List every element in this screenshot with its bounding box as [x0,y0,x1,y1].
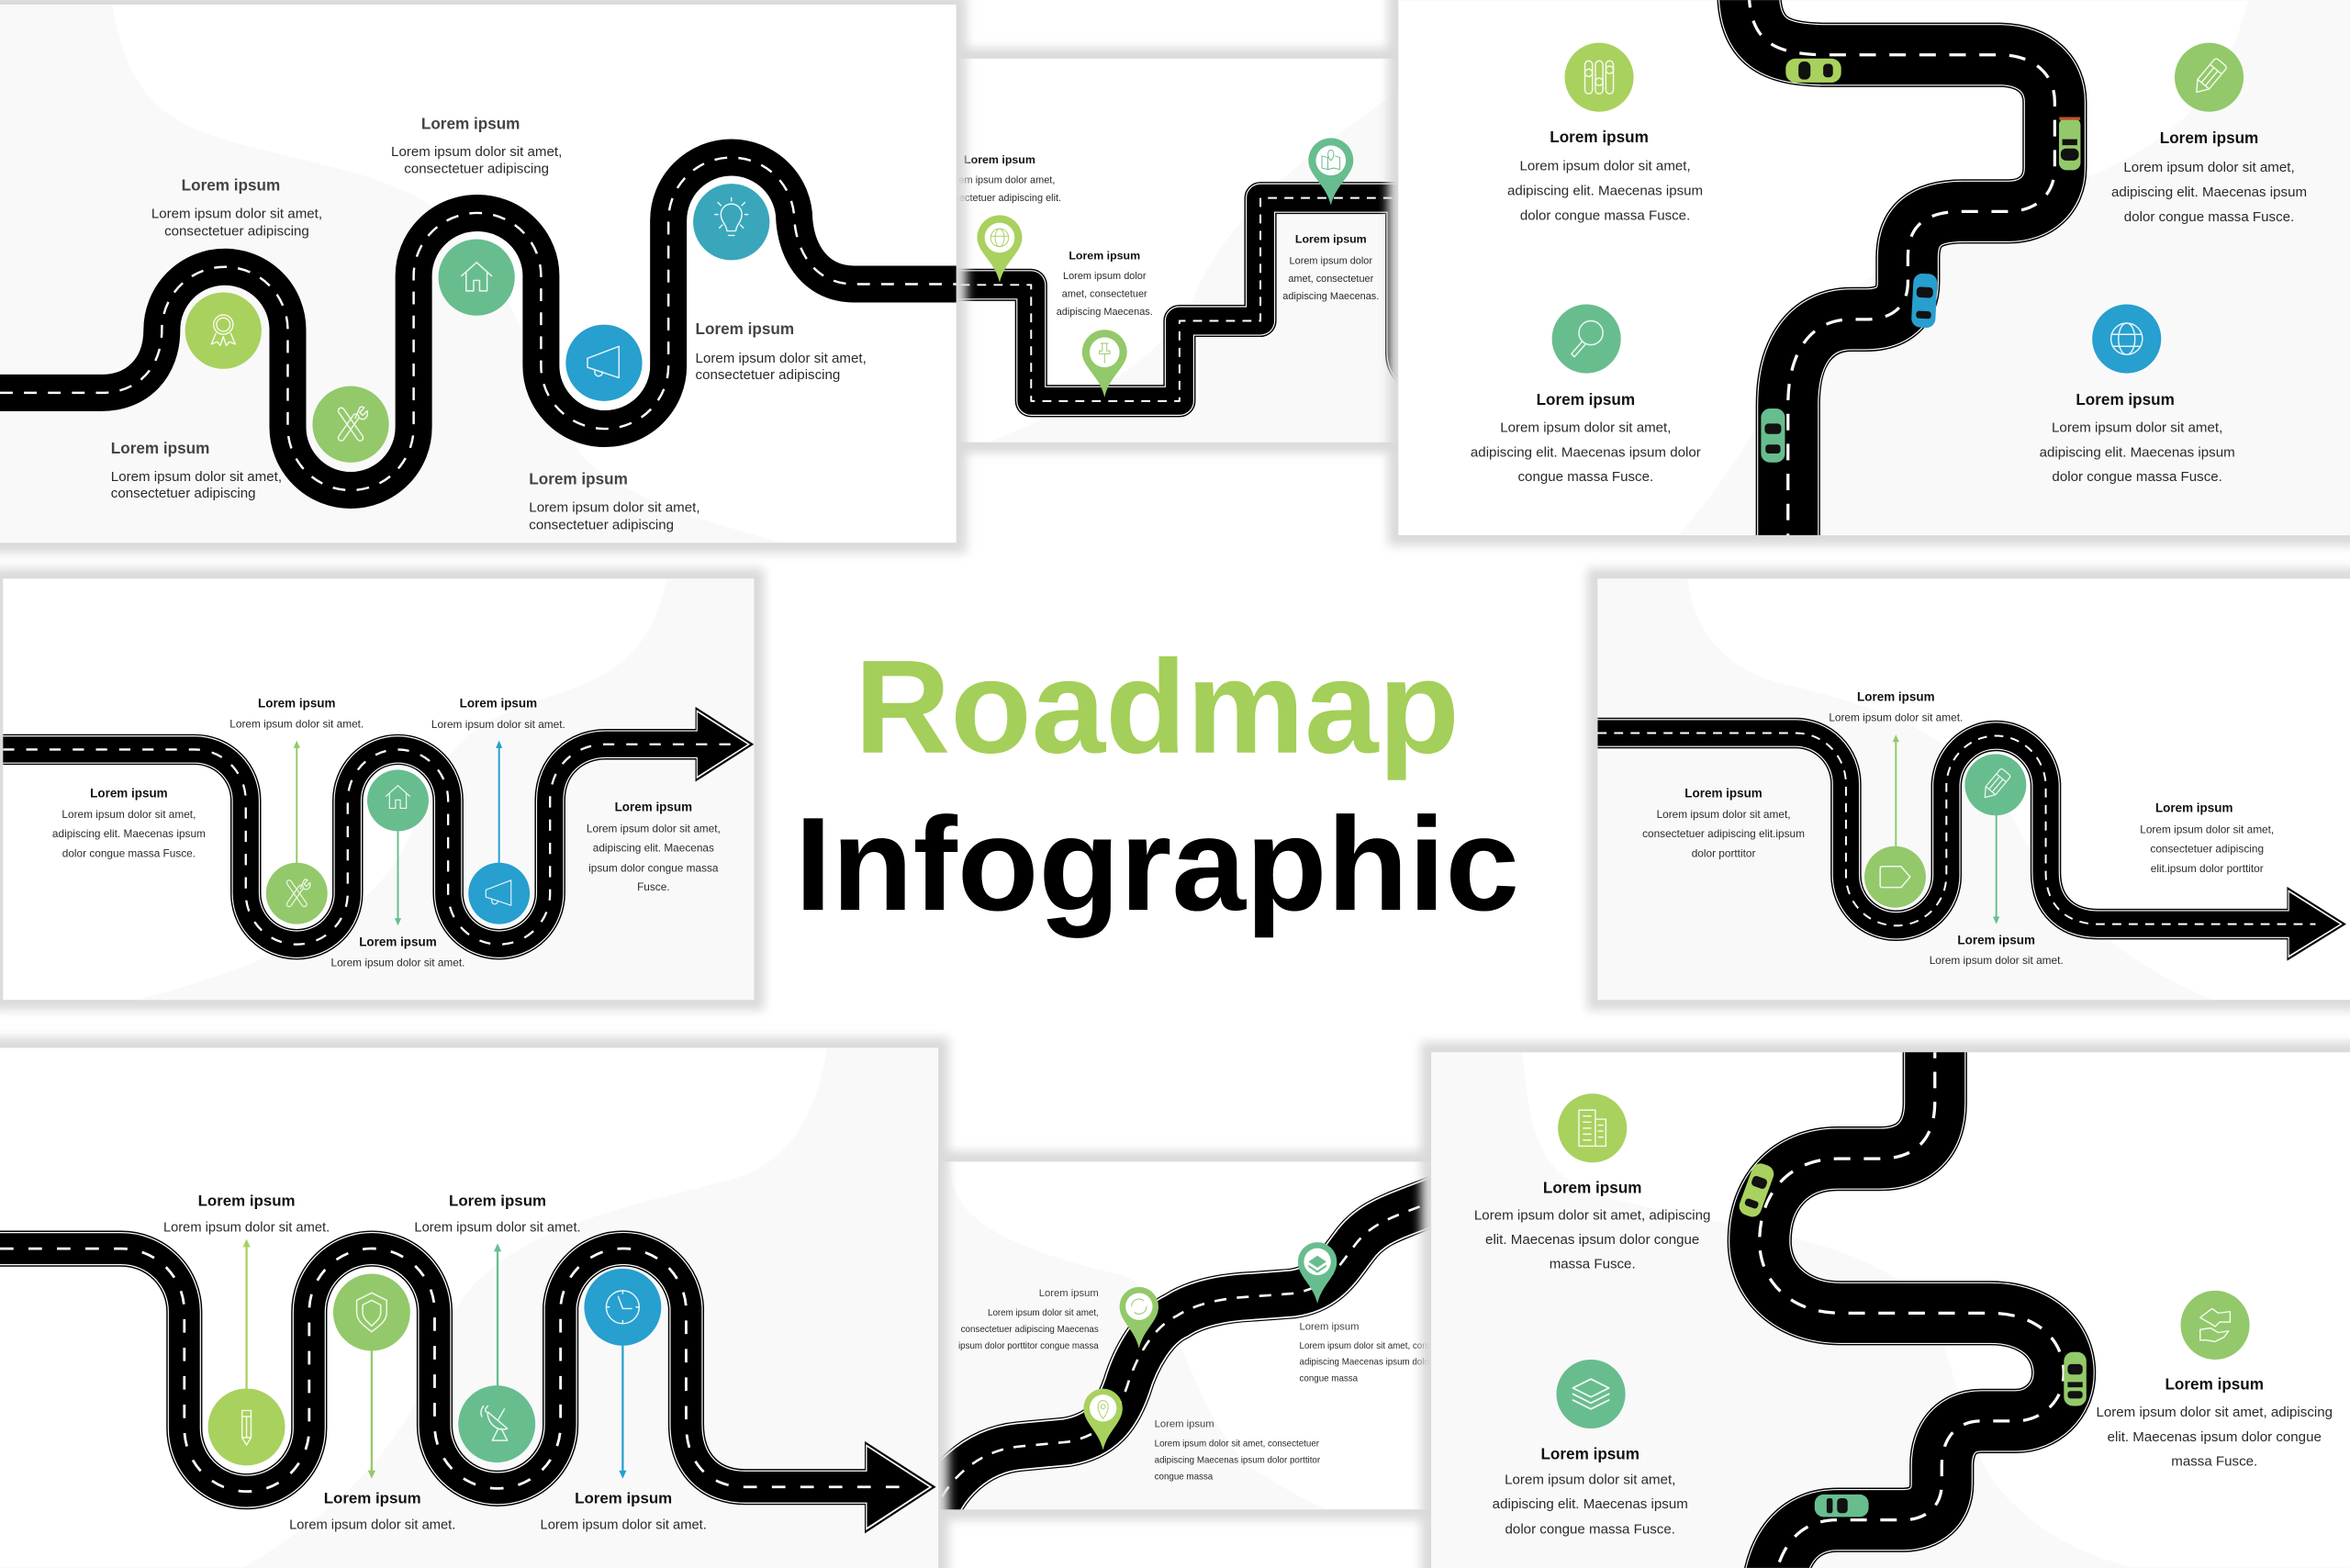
text: upper right label: congue massa [1300,1373,1359,1383]
marker: megaphone with up arrow [468,741,530,924]
text: top label two: Lorem ipsum [449,1192,546,1209]
text: top label: Lorem ipsum dolor sit amet. [1829,711,1963,724]
text: pin one label [958,155,1061,204]
title [795,633,1519,938]
panel: bottom left slide with arrow road [0,1037,948,1568]
text: megaphone label: Lorem ipsum [529,469,628,487]
text: top label two: Lorem ipsum dolor sit amet. [414,1220,581,1235]
text: top label one: Lorem ipsum dolor sit amet. [163,1220,330,1235]
text: right label: Lorem ipsum [615,800,692,813]
marker: clock with down arrow [584,1269,661,1479]
text: pin two label: amet, consectetuer [1062,288,1147,299]
road: meander with arrow head [3,707,754,945]
icon: tools [312,386,389,463]
text: magnifier label: congue massa Fusce. [1518,469,1653,485]
text: pin three label: amet, consectetuer [1288,274,1374,285]
text: top label two: Lorem ipsum dolor sit amet. [431,718,565,731]
car: green rotated [1739,1163,1774,1217]
text: right label: adipiscing elit. Maecenas [593,841,714,854]
text: megaphone label: consectetuer adipiscing [529,517,674,532]
text: pencil label: adipiscing elit. Maecenas ipsum [2111,185,2307,200]
text: top label two [431,697,565,731]
text: pin one label: consectetuer adipiscing elit. [938,193,1061,204]
text: pencil label [2111,129,2307,225]
road: winding [0,158,959,490]
panel: bottom right slide with cars [1421,1042,2350,1568]
pin: layers [1298,1242,1337,1304]
panel: middle right slide with arrow road [1587,568,2350,1011]
car: teal [1761,409,1785,463]
text: right label: elit.ipsum dolor porttitor [2151,862,2264,875]
text: top label one [229,696,364,730]
text: pin three label [1282,233,1379,302]
text: top label two [414,1192,581,1235]
text: upper right label [1300,1322,1429,1383]
icon: light bulb [693,184,769,260]
car: light green vertical [2064,1352,2087,1406]
text: lower label [1155,1418,1321,1483]
text: megaphone label: Lorem ipsum dolor sit amet, [529,500,700,516]
text: pin three label: Lorem ipsum dolor [1290,255,1372,266]
car: green horizontal [1785,59,1841,83]
text: magnifier label: Lorem ipsum [1537,390,1635,409]
text: magnifier label: adipiscing elit. Maecenas ipsum dolor [1471,444,1701,460]
pin: map [1308,138,1353,206]
text: globe label: adipiscing elit. Maecenas ipsum [2040,444,2235,460]
text: layers label [1493,1445,1688,1537]
pin: steering wheel [977,215,1022,283]
text: megaphone label [529,469,700,532]
text: handshake label [2096,1375,2333,1469]
text: upper right label: Lorem ipsum [1300,1321,1360,1332]
text: pin two label: Lorem ipsum dolor [1063,271,1147,282]
text: pencil label: dolor congue massa Fusce. [2124,209,2294,225]
road: wide curve [1760,1042,2064,1568]
text: bottom label two [541,1490,707,1532]
text: bulb label: Lorem ipsum [696,319,794,338]
text: right label: consectetuer adipiscing [2150,842,2264,855]
text: house label: consectetuer adipiscing [404,162,549,177]
marker: tools with up arrow [266,741,328,924]
text: house label [391,115,562,177]
road: meander with arrow head [0,1249,936,1533]
text: bottom label [1930,934,2064,967]
text: left label: Lorem ipsum dolor sit amet, [988,1308,1099,1318]
road: meander with arrow head [1597,733,2346,961]
car: teal horizontal [1815,1495,1869,1517]
text: pin two label: Lorem ipsum [1069,250,1140,263]
text: left label: Lorem ipsum [1039,1288,1099,1299]
panel: bottom middle slide with diagonal road [929,1151,1466,1520]
text: sliders label [1507,128,1703,223]
text: lower label: Lorem ipsum dolor sit amet, consectetuer [1155,1439,1320,1450]
marker: pencil with down arrow [1964,754,2026,924]
text: lower label: adipiscing Maecenas ipsum dolor porttitor [1155,1456,1321,1466]
text: tools label: consectetuer adipiscing [111,486,256,501]
text: top label one [163,1192,330,1235]
text: sliders label: Lorem ipsum [1550,128,1649,146]
text: bulb label: consectetuer adipiscing [696,367,840,383]
text: bottom label: Lorem ipsum [359,935,437,948]
text: top label [1829,689,1963,724]
text: bottom label two: Lorem ipsum [575,1490,672,1507]
road: diagonal [933,1199,1438,1517]
text: magnifier label: Lorem ipsum dolor sit amet, [1500,420,1671,435]
text: bulb label: Lorem ipsum dolor sit amet, [696,351,867,366]
text: layers label: Lorem ipsum [1540,1445,1639,1463]
text: bulb label [696,319,867,383]
marker: pencil with up arrow [208,1239,285,1465]
text: right label [2140,801,2274,875]
icon: layers [1557,1360,1626,1428]
text: right label [587,800,721,893]
title: Roadmap [855,633,1460,781]
panel: middle left slide with arrow road [0,568,765,1011]
text: house label: Lorem ipsum [421,115,520,133]
icon: megaphone [565,325,643,401]
icon: house [439,240,515,316]
text: handshake label: elit. Maecenas ipsum dolor congue [2108,1429,2322,1445]
text: left label: dolor porttitor [1692,846,1755,859]
text: left label: consectetuer adipiscing elit.ipsum [1642,827,1805,840]
pin: location [1083,1389,1123,1450]
text: building label: massa Fusce. [1550,1256,1636,1271]
icon: sliders [1564,43,1634,112]
text: right label: Lorem ipsum dolor sit amet, [587,823,721,835]
text: upper right label: Lorem ipsum dolor sit amet, consectetuer [1300,1341,1465,1351]
road: wide curve [1749,0,2054,543]
panel: top left slide with winding road [0,0,967,554]
text: bottom label: Lorem ipsum dolor sit amet. [1930,954,2064,967]
text: award label: Lorem ipsum [182,175,280,194]
text: tools label [111,439,282,501]
text: award label [151,175,322,239]
text: left label: ipsum dolor porttitor congue massa [958,1341,1099,1351]
car: light green vertical [2059,117,2080,170]
car: blue [1911,273,1938,329]
text: globe label: dolor congue massa Fusce. [2052,469,2222,485]
pin: push pin [1082,330,1127,398]
marker: house with down arrow [367,769,429,925]
text: pin three label: adipiscing Maecenas. [1282,291,1379,302]
marker: tag with up arrow [1864,734,1926,908]
text: left label: adipiscing elit. Maecenas ipsum [52,827,206,840]
text: building label [1474,1178,1710,1271]
pin: refresh [1120,1287,1158,1349]
text: bottom label one [289,1490,455,1532]
text: top label one: Lorem ipsum dolor sit amet. [229,717,364,730]
text: top label: Lorem ipsum [1857,689,1935,703]
icon: globe wheel [2092,305,2161,374]
text: pencil label: Lorem ipsum dolor sit amet, [2123,160,2295,175]
text: award label: consectetuer adipiscing [164,223,309,239]
road: stepped [945,198,1424,401]
icon: handshake [2181,1291,2250,1360]
text: building label: Lorem ipsum dolor sit amet, adipiscing [1474,1207,1710,1223]
icon: magnifier [1552,305,1621,374]
text: bottom label: Lorem ipsum dolor sit amet. [331,957,464,969]
title: Infographic [795,790,1519,938]
text: layers label: adipiscing elit. Maecenas ipsum [1493,1496,1688,1512]
text: handshake label: Lorem ipsum [2165,1375,2264,1394]
text: left label: consectetuer adipiscing Maecenas [961,1325,1099,1335]
text: left label [958,1288,1099,1351]
text: sliders label: adipiscing elit. Maecenas ipsum [1507,183,1703,198]
text: pin two label: adipiscing Maecenas. [1057,307,1153,318]
icon: award [185,292,262,369]
text: pin two label [1057,250,1153,318]
icon: pencil [2175,43,2244,112]
text: bottom label [331,935,464,969]
text: top label one: Lorem ipsum [258,696,336,710]
text: handshake label: massa Fusce. [2171,1453,2257,1469]
text: top label one: Lorem ipsum [198,1192,296,1209]
text: left label: Lorem ipsum [1684,787,1762,801]
text: building label: Lorem ipsum [1543,1178,1641,1196]
text: building label: elit. Maecenas ipsum dolor congue [1485,1232,1699,1248]
text: globe label: Lorem ipsum dolor sit amet, [2052,420,2222,435]
text: bottom label one: Lorem ipsum dolor sit amet. [289,1518,455,1532]
text: sliders label: dolor congue massa Fusce. [1520,207,1690,223]
marker: satellite dish with up arrow [458,1243,535,1462]
text: bottom label: Lorem ipsum [1957,934,2035,947]
text: pin three label: Lorem ipsum [1295,233,1367,246]
panel: top middle slide with stepped road [938,48,1424,453]
text: tools label: Lorem ipsum dolor sit amet, [111,469,282,485]
text: right label: Lorem ipsum dolor sit amet, [2140,823,2274,835]
text: layers label: dolor congue massa Fusce. [1505,1521,1675,1537]
text: left label: Lorem ipsum dolor sit amet, [1657,808,1791,821]
text: top label two: Lorem ipsum [460,697,537,711]
text: magnifier label [1471,390,1701,485]
text: lower label: congue massa [1155,1473,1214,1483]
text: house label: Lorem ipsum dolor sit amet, [391,144,562,160]
text: pencil label: Lorem ipsum [2160,129,2258,147]
text: left label: Lorem ipsum dolor sit amet, [62,808,196,821]
text: handshake label: Lorem ipsum dolor sit amet, adipiscing [2096,1405,2333,1420]
text: bottom label two: Lorem ipsum dolor sit amet. [541,1518,707,1532]
text: pin one label: Lorem ipsum [964,153,1035,166]
text: right label: ipsum dolor congue massa [588,861,719,874]
text: upper right label: adipiscing Maecenas ipsum dolor porttitor [1300,1357,1466,1367]
icon: building [1558,1093,1627,1162]
text: award label: Lorem ipsum dolor sit amet, [151,207,322,222]
text: left label [52,787,206,859]
marker: shield with down arrow [333,1274,410,1479]
panel: top right slide with cars [1388,0,2350,545]
text: tools label: Lorem ipsum [111,439,209,457]
text: right label: Lorem ipsum [2155,801,2232,814]
text: right label: Fusce. [637,880,670,893]
text: pin one label: Lorem ipsum dolor amet, [945,174,1055,185]
text: bottom label one: Lorem ipsum [324,1490,421,1507]
text: sliders label: Lorem ipsum dolor sit amet, [1519,158,1691,174]
text: left label: Lorem ipsum [90,787,168,801]
text: left label [1642,787,1805,859]
text: globe label: Lorem ipsum [2076,390,2175,409]
text: lower label: Lorem ipsum [1155,1418,1214,1429]
text: left label: dolor congue massa Fusce. [62,846,196,859]
text: layers label: Lorem ipsum dolor sit amet, [1505,1472,1675,1487]
text: globe label [2040,390,2235,485]
